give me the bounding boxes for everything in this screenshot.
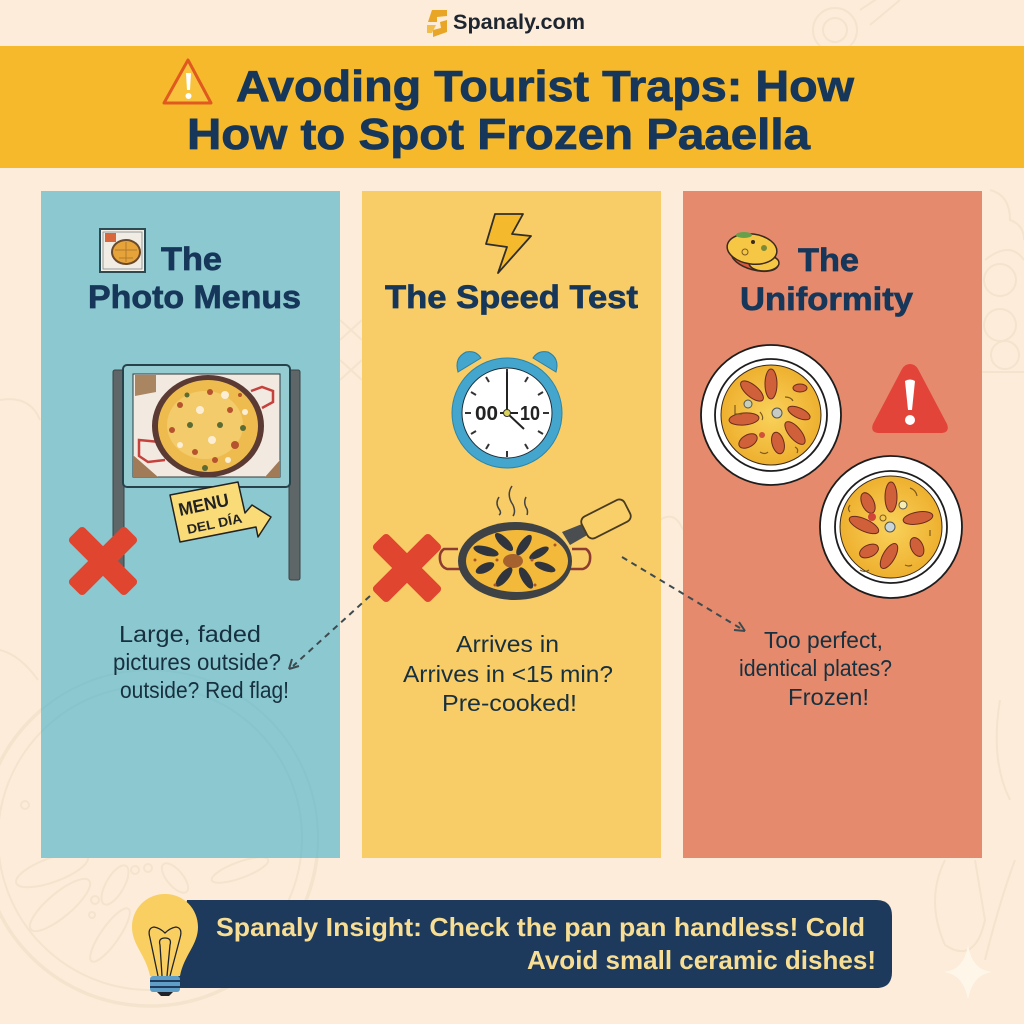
icon: photo of paella: [100, 229, 145, 272]
icon: lightning bolt: [486, 214, 531, 273]
menu del dia arrow sign: [170, 482, 271, 542]
sparkle: [944, 945, 992, 1000]
body text: Pre-cooked!: [442, 690, 577, 716]
icon: red x: [371, 532, 443, 604]
body text: Arrives in <15 min?: [403, 661, 613, 687]
insight text line 1: Spanaly Insight: Check the pan pan handless! Cold: [216, 912, 865, 942]
body text: [403, 631, 613, 716]
plate 2: [820, 456, 962, 598]
icon: light bulb: [132, 894, 198, 996]
panel: the photo menus: Photo Menus: [88, 279, 301, 315]
body text: Frozen!: [788, 684, 869, 710]
alarm clock: 10: [520, 403, 540, 425]
title line 1: Avoding Tourist Traps: How: [236, 62, 855, 111]
heading: The Speed Test: [385, 279, 638, 315]
logo icon: [427, 10, 447, 37]
title line 2: How to Spot Frozen Paaella: [187, 110, 811, 159]
title banner: [0, 46, 1024, 168]
body text: Too perfect,: [764, 627, 883, 653]
heading: The: [161, 241, 222, 277]
menu del dia arrow sign: MENU: [177, 490, 231, 520]
body text: outside? Red flag!: [120, 677, 289, 703]
body text: Large, faded: [119, 621, 261, 647]
arrow: speed test to photo menus: [289, 596, 370, 669]
panel: the uniformity: [683, 191, 982, 858]
body text: [739, 627, 892, 710]
arrow: pan to uniformity: [622, 557, 745, 631]
body text: identical plates?: [739, 655, 892, 681]
paella pan with steam: [440, 486, 633, 600]
icon: mini paella: [725, 231, 781, 276]
heading: The: [798, 242, 859, 278]
faded background circle: [0, 670, 318, 1006]
body text: Arrives in: [456, 631, 559, 657]
panel: the uniformity: Uniformity: [740, 281, 913, 317]
body text: [113, 621, 289, 703]
icon: warning triangle: [164, 60, 211, 103]
billboard with paella photo: [113, 365, 300, 580]
insight banner: [178, 900, 892, 988]
body text: pictures outside?: [113, 649, 281, 675]
panel: the speed test: [362, 191, 661, 858]
insight text line 2: Avoid small ceramic dishes!: [527, 945, 876, 975]
icon: warning triangle: [872, 364, 948, 433]
menu del dia arrow sign: DEL DÍA: [186, 510, 244, 537]
logo text: Spanaly.com: [453, 11, 585, 34]
icon: red x: [67, 525, 139, 597]
plate 1: [701, 345, 841, 485]
panel: the photo menus: [41, 191, 340, 858]
logo: [427, 10, 585, 37]
alarm clock: [452, 352, 562, 468]
alarm clock: 00: [475, 403, 498, 425]
